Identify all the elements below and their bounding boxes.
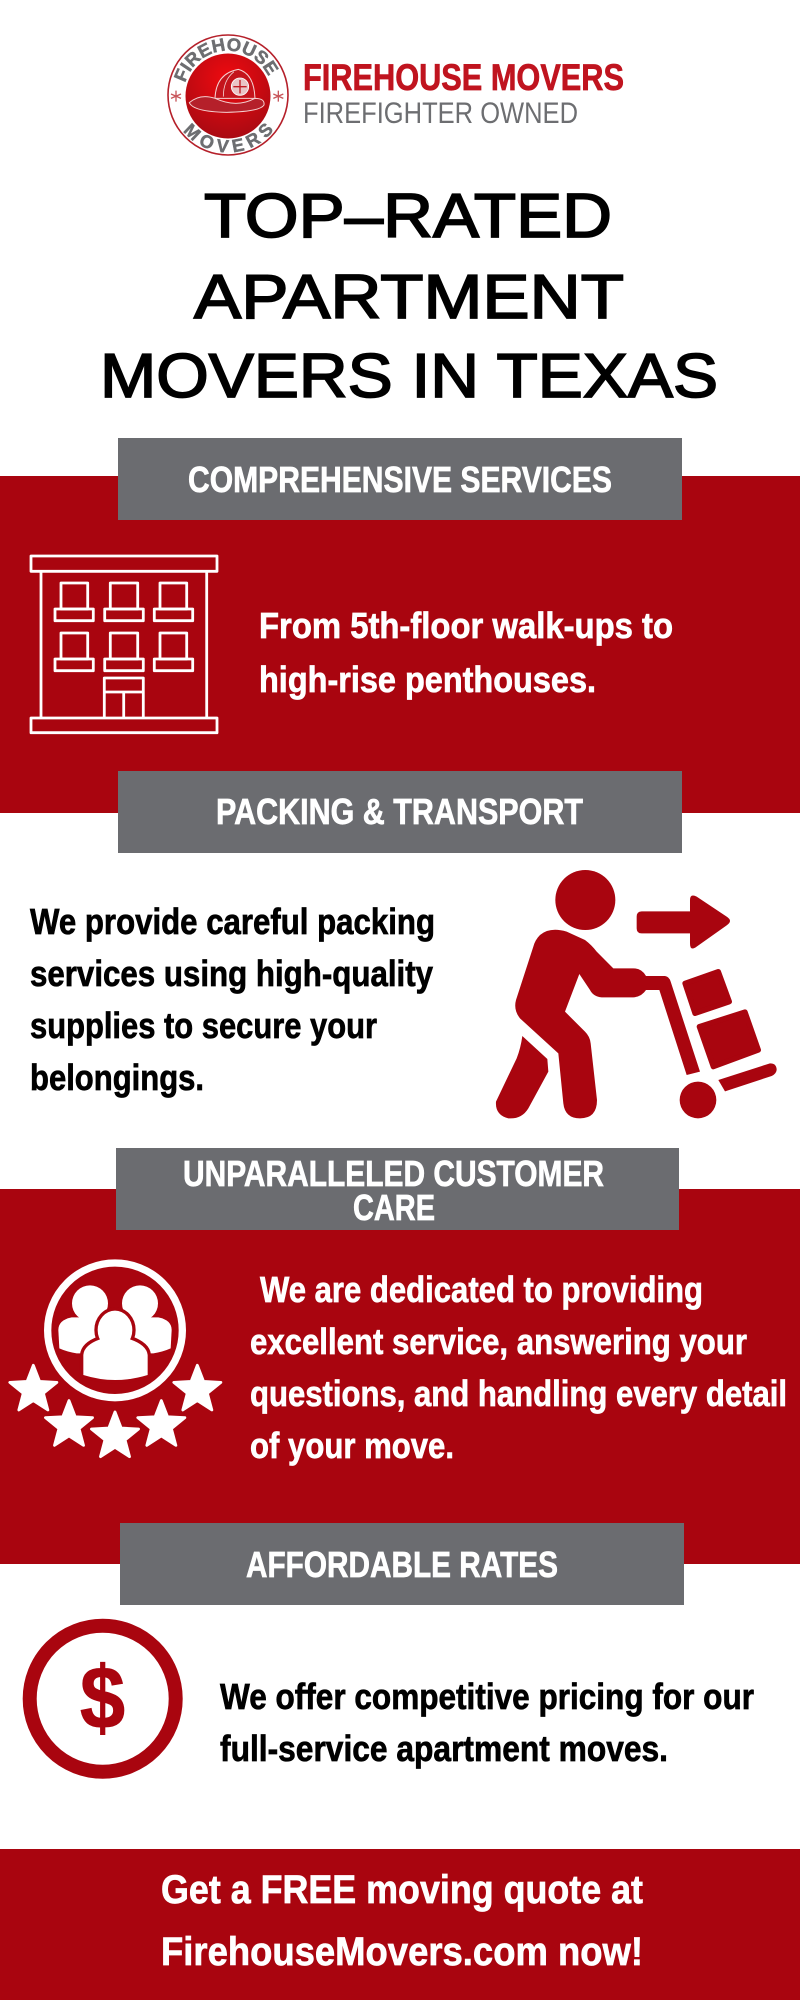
- brand name: FIREHOUSE MOVERS: [303, 57, 624, 98]
- footer call to action: Get a FREE moving quote at: [161, 1868, 643, 1912]
- heading: customer care: [116, 1148, 679, 1230]
- panel: customer care: [0, 1148, 800, 1564]
- text: services description: From 5th-floor walk-ups to: [259, 605, 673, 646]
- text: services description: [259, 605, 673, 700]
- heading: customer care: CARE: [353, 1187, 435, 1228]
- text: packing description: We provide careful packing: [30, 901, 435, 942]
- text: customer care description: of your move.: [250, 1425, 454, 1466]
- text: customer care description: [250, 1269, 787, 1466]
- text: rates description: [220, 1676, 754, 1769]
- panel: affordable rates: [30, 1523, 754, 1772]
- logo: [167, 34, 624, 156]
- heading: packing and transport: PACKING & TRANSPORT: [216, 791, 583, 832]
- logo badge: [167, 34, 289, 156]
- text: packing description: services using high-quality: [30, 953, 433, 994]
- heading: affordable rates: AFFORDABLE RATES: [246, 1544, 558, 1585]
- text: packing description: supplies to secure your: [30, 1005, 377, 1046]
- heading: customer care: UNPARALLELED CUSTOMER: [183, 1153, 604, 1194]
- footer call to action: [0, 1849, 800, 2000]
- icon: mover with hand truck: [496, 870, 777, 1118]
- title: MOVERS IN TEXAS: [100, 342, 718, 411]
- text: rates description: full-service apartment moves.: [220, 1728, 668, 1769]
- tagline: FIREFIGHTER OWNED: [303, 97, 578, 130]
- text: packing description: belongings.: [30, 1057, 204, 1098]
- heading: comprehensive services: COMPREHENSIVE SERVICES: [188, 459, 612, 500]
- icon: dollar coin: [30, 1626, 176, 1772]
- panel: comprehensive services: [0, 438, 800, 813]
- icon: dollar coin: $: [80, 1648, 125, 1747]
- heading: packing and transport: [118, 771, 682, 853]
- logo badge: MOVERS: [183, 122, 272, 152]
- title: [100, 182, 718, 411]
- text: services description: high-rise penthouses.: [259, 659, 596, 700]
- title: APARTMENT: [194, 263, 624, 332]
- icon: customers with star rating: [10, 1263, 221, 1457]
- logo badge: FIREHOUSE: [174, 38, 279, 82]
- title: TOP–RATED: [204, 182, 612, 251]
- icon: apartment building: [31, 556, 217, 733]
- heading: comprehensive services: [118, 438, 682, 520]
- footer call to action: FirehouseMovers.com now!: [161, 1930, 643, 1974]
- text: customer care description: We are dedicated to providing: [260, 1269, 703, 1310]
- heading: affordable rates: [120, 1523, 684, 1605]
- panel: packing and transport: [30, 771, 777, 1118]
- text: packing description: [30, 901, 435, 1098]
